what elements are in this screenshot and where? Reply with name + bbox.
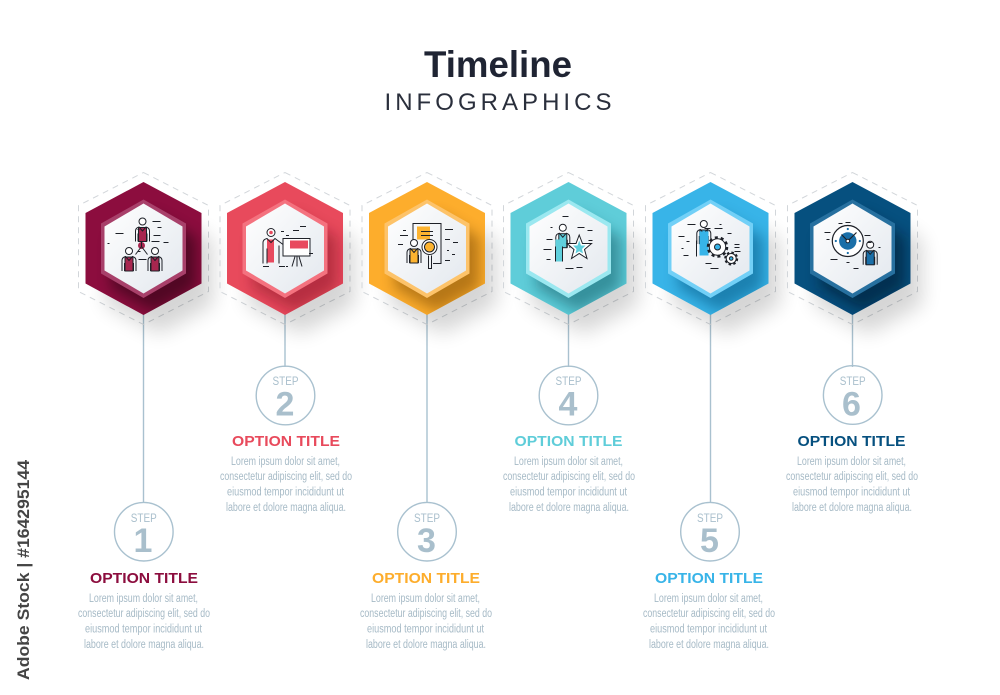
step text 5: labore et dolore magna aliqua. — [649, 639, 769, 651]
step text 4: consectetur adipiscing elit, sed do — [503, 471, 635, 483]
step text 4: OPTION TITLE — [514, 433, 622, 450]
icon: team network — [108, 218, 168, 271]
connector line 6 — [852, 310, 854, 367]
step badge 4 — [539, 366, 598, 425]
step text 6 — [786, 433, 918, 514]
step badge 3 — [398, 502, 456, 561]
connector line 3 — [426, 310, 428, 503]
step text 2: consectetur adipiscing elit, sed do — [220, 471, 352, 483]
step badge 1 — [114, 502, 173, 561]
step text 5: OPTION TITLE — [655, 570, 763, 587]
step text 5: consectetur adipiscing elit, sed do — [643, 608, 775, 620]
hexagon step 4 — [504, 172, 638, 334]
hexagon step 6 — [788, 172, 922, 334]
step text 4: labore et dolore magna aliqua. — [509, 502, 629, 514]
step text 5: eiusmod tempor incididunt ut — [650, 624, 768, 636]
step badge 6: 6 — [842, 386, 861, 424]
step text 5: Lorem ipsum dolor sit amet, — [654, 593, 763, 605]
step text 2: Lorem ipsum dolor sit amet, — [231, 456, 340, 468]
connector line 2 — [284, 310, 286, 367]
step text 5 — [643, 570, 775, 651]
side label: Adobe Stock | #164295144 — [14, 459, 33, 680]
step text 3: Lorem ipsum dolor sit amet, — [371, 593, 480, 605]
step text 6: OPTION TITLE — [798, 433, 906, 450]
step badge 5: 5 — [700, 522, 719, 560]
step text 2 — [220, 433, 352, 514]
hexagon step 1 — [78, 172, 213, 334]
step badge 6 — [823, 366, 882, 424]
step badge 3: 3 — [417, 522, 436, 560]
hexagon step 2 — [220, 172, 354, 334]
step text 1: OPTION TITLE — [90, 570, 198, 587]
step text 4: Lorem ipsum dolor sit amet, — [514, 456, 623, 468]
step badge 2: STEP — [272, 376, 299, 388]
connector line 1 — [142, 310, 144, 503]
step text 2: eiusmod tempor incididunt ut — [227, 486, 345, 498]
hexagon step 3 — [362, 172, 496, 334]
step text 1: eiusmod tempor incididunt ut — [85, 624, 203, 636]
title: Timeline — [424, 44, 572, 85]
step badge 1: STEP — [131, 513, 157, 525]
step text 6: labore et dolore magna aliqua. — [792, 502, 912, 514]
step text 3: OPTION TITLE — [372, 570, 480, 587]
step badge 4: 4 — [559, 386, 578, 424]
icon: person with gears — [678, 220, 740, 268]
icon: person with star — [544, 216, 592, 268]
step text 3 — [360, 570, 492, 651]
step badge 6: STEP — [840, 376, 866, 388]
step badge 2 — [256, 366, 315, 425]
subtitle: INFOGRAPHICS — [384, 89, 612, 116]
hexagon step 5 — [646, 172, 780, 334]
step badge 4: STEP — [556, 376, 582, 388]
step text 1: consectetur adipiscing elit, sed do — [78, 608, 210, 620]
icon: document review — [398, 224, 458, 268]
step badge 1: 1 — [134, 522, 152, 560]
connector line 5 — [710, 310, 712, 503]
step text 6: eiusmod tempor incididunt ut — [793, 486, 911, 498]
step badge 2: 2 — [276, 386, 294, 424]
step badge 5 — [681, 502, 739, 561]
step text 1 — [78, 570, 210, 651]
step text 1: labore et dolore magna aliqua. — [84, 639, 204, 651]
step text 3: labore et dolore magna aliqua. — [366, 639, 486, 651]
step text 3: consectetur adipiscing elit, sed do — [360, 608, 492, 620]
step badge 5: STEP — [697, 513, 723, 525]
icon: presenter with board — [263, 226, 313, 266]
step text 6: Lorem ipsum dolor sit amet, — [797, 456, 906, 468]
step text 2: OPTION TITLE — [232, 433, 340, 450]
step text 4: eiusmod tempor incididunt ut — [510, 486, 628, 498]
connector line 4 — [568, 310, 570, 367]
step text 2: labore et dolore magna aliqua. — [226, 502, 346, 514]
step badge 3: STEP — [414, 513, 440, 525]
step text 4 — [503, 433, 635, 514]
step text 3: eiusmod tempor incididunt ut — [367, 624, 485, 636]
icon: clock with person — [824, 222, 880, 268]
step text 6: consectetur adipiscing elit, sed do — [786, 471, 918, 483]
step text 1: Lorem ipsum dolor sit amet, — [89, 593, 198, 605]
